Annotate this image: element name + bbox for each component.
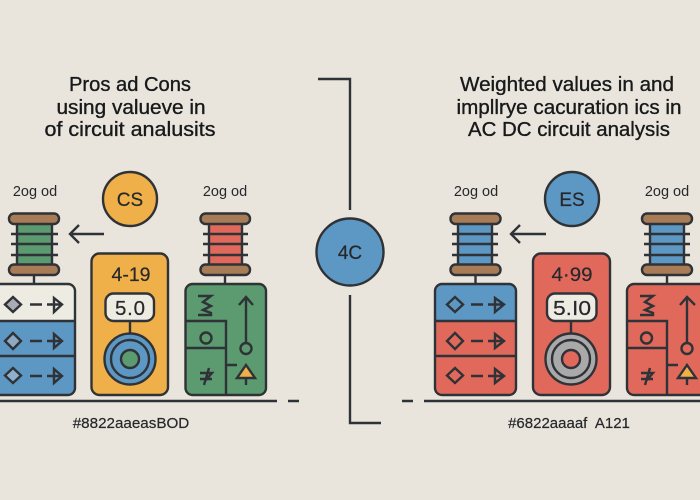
central circle 4C [316, 218, 384, 286]
right caption: #6822aaaaf A121 [508, 415, 630, 432]
circle CS [103, 172, 157, 226]
left stacked panel [0, 284, 75, 395]
right title: impllrye cacuration ics in [456, 96, 682, 119]
left orange card: 4-19 [112, 265, 150, 286]
right coil: blue [450, 214, 500, 284]
central divider with bracket lines [318, 79, 381, 423]
circle CS: CS [117, 190, 143, 211]
central circle 4C: 4C [338, 243, 362, 264]
left label: coil 1: 2og od [13, 184, 57, 200]
row icons [5, 297, 62, 383]
right title: Weighted values in and [460, 73, 674, 96]
right red card [533, 254, 610, 395]
red circuit panel [627, 284, 700, 395]
right baseline [402, 400, 700, 402]
left title: Pros ad Cons [69, 73, 191, 96]
green circuit panel [186, 284, 266, 395]
left orange card: 5.0 [115, 297, 145, 320]
right label: coil 3: 2og od [454, 184, 498, 200]
right stacked panel [435, 284, 516, 395]
row icons [447, 297, 504, 383]
left orange card [92, 254, 168, 395]
right red card: 4·99 [552, 265, 592, 286]
right red card: 5.I0 [553, 297, 591, 320]
left title [44, 73, 215, 141]
circle ES [545, 172, 599, 226]
arrow pointing to right coil [511, 225, 546, 243]
right title: AC DC circuit analysis [468, 118, 670, 141]
circle ES: ES [559, 190, 585, 211]
left title: of circuit analusits [44, 118, 215, 141]
left baseline [0, 400, 299, 402]
left coil: green [9, 214, 59, 284]
left caption: #8822aaeasBOD [73, 415, 189, 432]
left title: using valueve in [56, 96, 206, 119]
label: coil 2: 2og od [203, 184, 247, 200]
right title [456, 73, 682, 141]
label: coil 4: 2og od [645, 184, 689, 200]
blue coil far right [642, 214, 692, 284]
red coil [200, 214, 250, 284]
arrow pointing to left coil [70, 225, 104, 243]
